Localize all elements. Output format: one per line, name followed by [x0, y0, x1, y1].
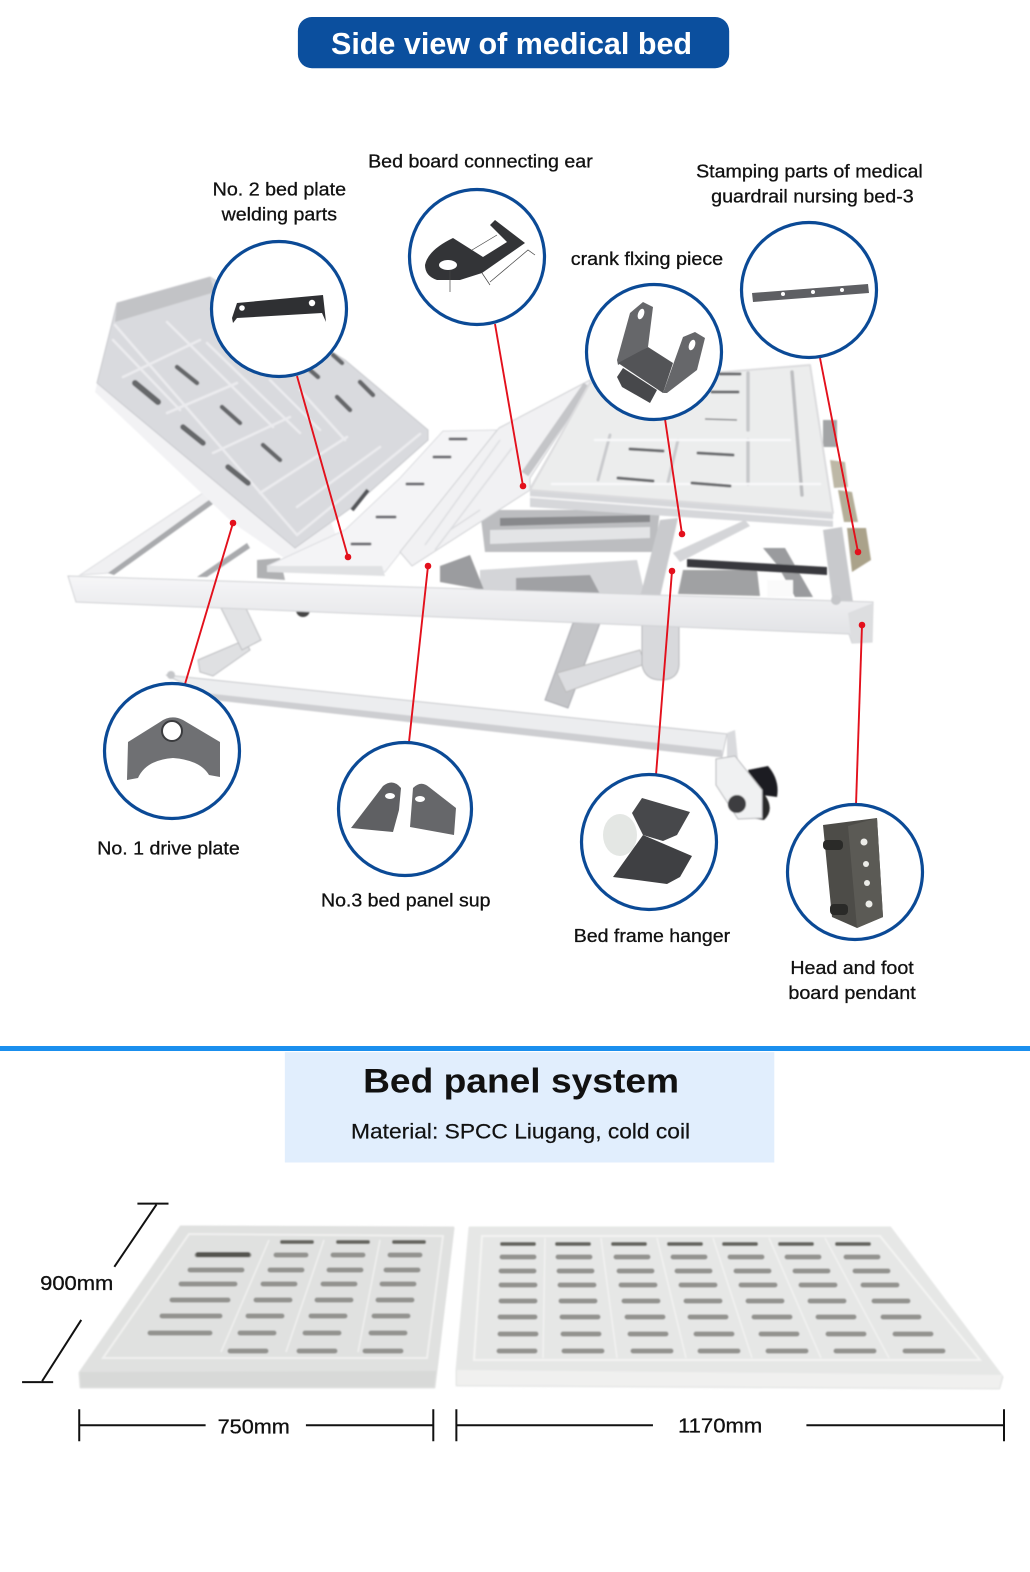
- panel photo: 750mm section: [80, 1227, 453, 1387]
- seat panel: [267, 430, 497, 576]
- labels: top of bed: crank flxing piece: [571, 248, 723, 269]
- heading panel: bed panel system: Bed panel system: [363, 1062, 679, 1100]
- callout: head and foot board pendant: [788, 804, 922, 940]
- labels: bottom of bed: [97, 838, 917, 1003]
- dimension: 900mm: [22, 1204, 169, 1382]
- foot end tabs: [823, 420, 871, 572]
- callout: No. 1 drive plate: [104, 684, 240, 818]
- labels: top of bed: guardrail nursing bed-3: [711, 186, 914, 207]
- callout: bed frame hanger: [582, 774, 716, 910]
- lifting mechanism: [257, 510, 853, 604]
- labels: bottom of bed: Head and foot: [790, 957, 915, 978]
- dimension: 750mm: [79, 1409, 433, 1441]
- title pill: [298, 17, 729, 68]
- labels: top of bed: Stamping parts of medical: [696, 161, 923, 182]
- labels: bottom of bed: No. 1 drive plate: [97, 838, 240, 859]
- labels: bottom of bed: board pendant: [788, 982, 917, 1003]
- callout: crank fixing piece: [586, 284, 722, 420]
- title pill: Side view of medical bed: [331, 28, 692, 61]
- red leader lines: [185, 324, 865, 805]
- labels: bottom of bed: Bed frame hanger: [574, 925, 730, 946]
- dimension: 750mm: 750mm: [218, 1416, 290, 1438]
- labels: bottom of bed: No.3 bed panel sup: [321, 890, 490, 911]
- caster: [716, 730, 778, 820]
- callout: bed board connecting ear: [410, 190, 544, 324]
- dimension: 1170mm: [456, 1409, 1004, 1441]
- heading panel: bed panel system: Material: SPCC Liugang, cold coil: [351, 1120, 690, 1143]
- section divider: [0, 1046, 1030, 1051]
- labels: top of bed: No. 2 bed plate: [213, 179, 346, 200]
- main side rail: [68, 576, 873, 643]
- thigh panel: [400, 380, 590, 566]
- panel photo: 1170mm section: [457, 1228, 1002, 1388]
- foot panel: [530, 365, 833, 527]
- labels: top of bed: Bed board connecting ear: [368, 151, 593, 172]
- callout: No. 2 bed plate welding parts: [212, 242, 346, 376]
- callout: No.3 bed panel sup: [338, 742, 472, 876]
- heading panel: bed panel system: [285, 1052, 774, 1162]
- dimension: 900mm: 900mm: [40, 1273, 113, 1295]
- callout: stamping parts: [742, 222, 876, 358]
- rear frame and head support: [80, 493, 679, 708]
- wheel behind frame: [296, 603, 310, 617]
- labels: top of bed: [213, 151, 923, 269]
- head panel: [95, 277, 428, 560]
- dimension: 1170mm: 1170mm: [678, 1415, 762, 1437]
- bed illustration: [68, 277, 873, 820]
- lower rail: [166, 671, 727, 757]
- labels: top of bed: welding parts: [221, 204, 337, 225]
